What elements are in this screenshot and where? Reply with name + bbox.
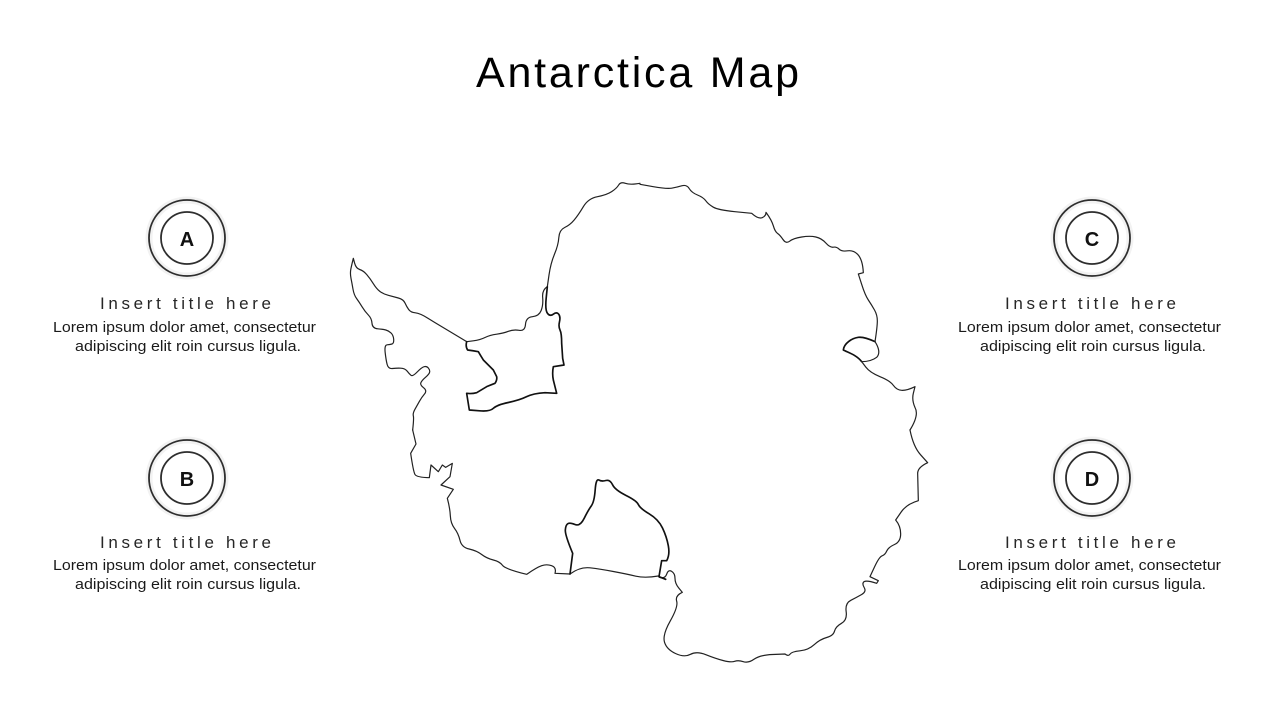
west coast and Ross shelf — [411, 430, 669, 579]
icon: circle B: B — [180, 469, 194, 491]
icon: circle C: C — [1085, 229, 1099, 251]
text block B: Lorem ipsum dolor amet, consectetur — [53, 557, 316, 574]
heading B: Insert title here — [100, 533, 271, 552]
text block D: adipiscing elit roin cursus ligula. — [980, 576, 1206, 593]
text block A — [53, 319, 316, 355]
text block D — [958, 557, 1221, 593]
text block B: adipiscing elit roin cursus ligula. — [75, 576, 301, 593]
heading D: Insert title here — [1005, 533, 1176, 552]
icon: circle D: D — [1085, 469, 1099, 491]
text block C — [958, 319, 1221, 355]
peninsula and Ronne shelf outline — [350, 183, 640, 430]
panel B — [53, 440, 316, 593]
icon: circle D — [1054, 440, 1130, 516]
icon: circle A: A — [180, 229, 194, 251]
icon: circle A — [149, 200, 225, 276]
panel A — [53, 200, 316, 355]
Ronne ice shelf — [466, 287, 564, 411]
icon: circle B — [149, 440, 225, 516]
north-east coast — [640, 184, 916, 430]
icon: circle C — [1054, 200, 1130, 276]
heading A: Insert title here — [100, 294, 271, 313]
Amery ice shelf — [843, 337, 875, 362]
text block D: Lorem ipsum dolor amet, consectetur — [958, 557, 1221, 574]
panel C — [958, 200, 1221, 355]
text block C: Lorem ipsum dolor amet, consectetur — [958, 319, 1221, 336]
Ross ice shelf — [565, 480, 669, 579]
title: Antarctica Map — [476, 49, 799, 97]
heading C: Insert title here — [1005, 294, 1176, 313]
map: Antarctica outline — [350, 183, 928, 662]
text block C: adipiscing elit roin cursus ligula. — [980, 338, 1206, 355]
panel D — [958, 440, 1221, 593]
text block B — [53, 557, 316, 593]
south-east coast — [659, 430, 928, 662]
text block A: Lorem ipsum dolor amet, consectetur — [53, 319, 316, 336]
text block A: adipiscing elit roin cursus ligula. — [75, 338, 301, 355]
